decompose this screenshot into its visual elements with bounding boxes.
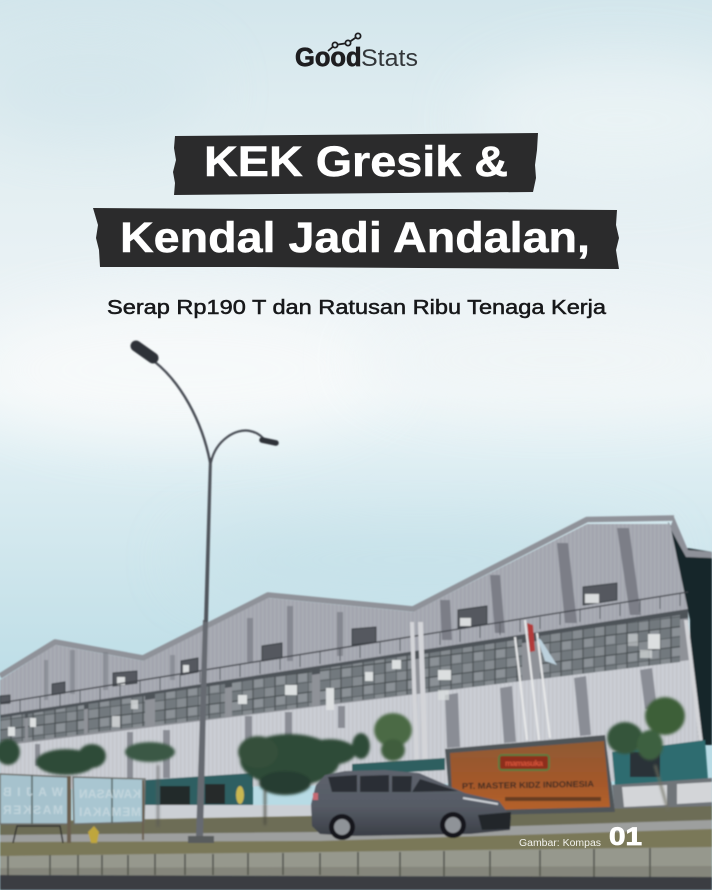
building: upper wall columns — [44, 528, 641, 700]
building: dark right-hand tower — [668, 517, 712, 745]
car rear wheel — [329, 814, 355, 840]
tree: large centre tree — [238, 734, 356, 825]
image credit: Gambar: Kompas — [519, 838, 601, 849]
page number: 01 — [609, 823, 642, 851]
sign logo: mamasuka — [505, 759, 544, 768]
billboard panels — [0, 774, 145, 843]
car body — [311, 770, 511, 836]
building: teal ground-floor band — [145, 740, 708, 808]
title tape 2 — [93, 208, 619, 269]
building: balcony railing — [0, 592, 688, 722]
building: bright window panes — [8, 634, 660, 736]
logo: GoodStats: Stats — [361, 45, 418, 72]
street lamp — [136, 346, 276, 843]
sign text: PT. MASTER KIDZ INDONESIA — [462, 779, 594, 791]
building: light window panes — [117, 594, 599, 685]
logo: GoodStats — [295, 33, 418, 72]
car windows — [328, 775, 458, 792]
car — [311, 770, 511, 840]
building: main window band — [0, 615, 680, 744]
subtitle: Serap Rp190 T dan Ratusan Ribu Tenaga Kerja — [107, 297, 607, 319]
tree: left small trees — [0, 739, 175, 827]
billboard mirrored text: KAWASAN — [79, 787, 141, 801]
building: upper wall — [0, 524, 688, 725]
title tape 1 — [173, 133, 538, 195]
fence walls — [145, 778, 712, 823]
billboard mirrored text: MEMAKAI — [79, 805, 141, 819]
building: lower wall — [0, 660, 703, 790]
asphalt road — [0, 875, 712, 890]
company sign — [445, 735, 615, 816]
yellow road marker — [88, 826, 99, 843]
sign logo — [499, 755, 549, 770]
car front wheel — [440, 812, 466, 838]
tree: behind car, light green — [352, 713, 412, 761]
flag poles and flags — [515, 620, 557, 740]
tree: right of sign — [607, 697, 685, 810]
billboard mirrored text: MASKER — [3, 803, 63, 817]
building: lower wall columns — [35, 668, 657, 778]
car headlight and trim — [463, 798, 498, 804]
concrete curb — [0, 847, 712, 877]
logo wordmark: Good — [295, 44, 362, 72]
trees — [0, 697, 685, 827]
title line 1: KEK Gresik & — [204, 139, 508, 186]
building: window band backing — [0, 610, 690, 748]
logo chart line — [328, 33, 361, 51]
building: roof edge — [0, 518, 674, 676]
photo: factory scene — [0, 346, 712, 890]
building: white downpipes — [410, 620, 707, 775]
ground: road strip and grass — [0, 806, 712, 856]
title line 2: Kendal Jadi Andalan, — [120, 215, 590, 262]
billboard mirrored text: WAJIB — [3, 785, 63, 799]
building: upper floor windows — [0, 583, 617, 704]
billboard mirrored text — [3, 785, 141, 819]
